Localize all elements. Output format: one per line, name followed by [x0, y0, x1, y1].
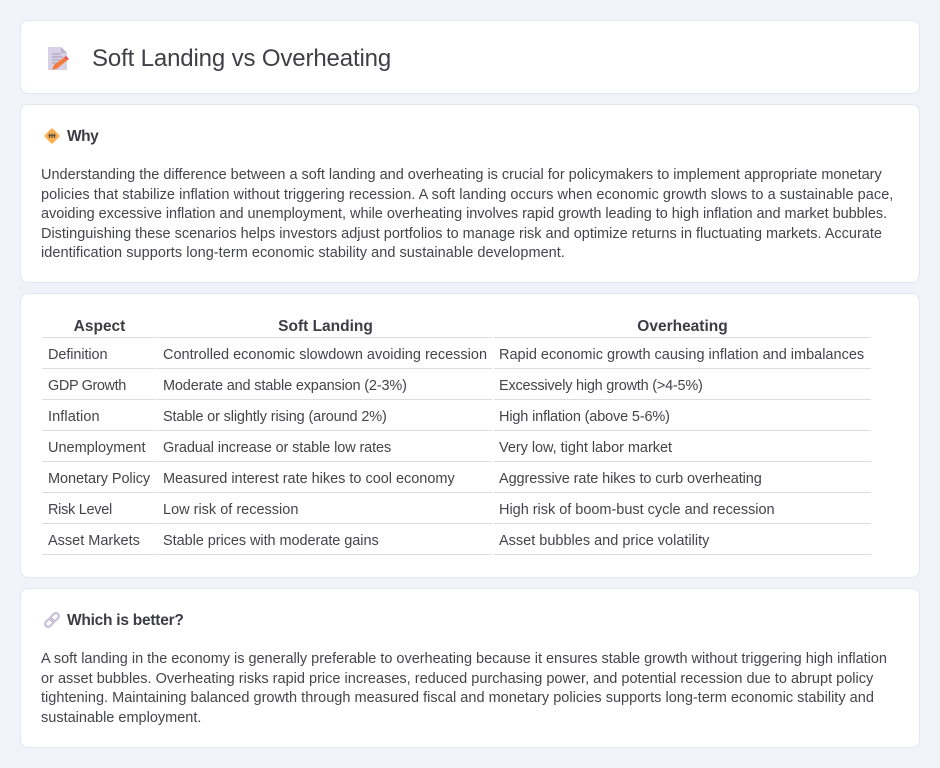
- row: risk level: Risk Level: [48, 502, 112, 518]
- row: asset markets: Asset Markets: [48, 533, 140, 549]
- text block: verdict: [41, 651, 887, 726]
- row: risk level: High risk of boom-bust cycle and recession: [499, 502, 775, 518]
- text block: why explanation: Understanding the difference between a soft landing and overheating is crucial for policymakers to implement appropriate monetary: [41, 167, 882, 183]
- heading: why: Why: [67, 128, 98, 145]
- icon: warning diamond: [44, 128, 60, 144]
- row: definition: Definition: [48, 347, 107, 363]
- text block: verdict: A soft landing in the economy is generally preferable to overheating because it ensures stable growth without triggering high inflation: [41, 651, 887, 667]
- text block: why explanation: [41, 167, 893, 261]
- panel: why: [20, 104, 920, 283]
- heading: which is better: Which is better?: [67, 612, 184, 629]
- icon: document with pencil: [48, 47, 69, 70]
- table header: Soft Landing: [278, 318, 373, 335]
- row: monetary policy: Aggressive rate hikes to curb overheating: [499, 471, 762, 487]
- row: definition: Rapid economic growth causing inflation and imbalances: [499, 347, 864, 363]
- panel: title header: [20, 20, 920, 94]
- text block: why explanation: identification supports long-term economic stability and sustainable development.: [41, 245, 565, 261]
- table header: [74, 318, 728, 335]
- icon: chain link: [44, 612, 60, 628]
- row: definition: Controlled economic slowdown avoiding recession: [163, 347, 487, 363]
- text block: verdict: tightening. Maintaining balanced growth through measured fiscal and monetary policies supports long-term economic stability and: [41, 690, 874, 706]
- row: inflation: Inflation: [48, 409, 100, 425]
- text block: why explanation: policies that stabilize inflation without triggering recession. A soft landing occurs when economic growth slows to a sustainable pace,: [41, 186, 893, 202]
- title: Soft Landing vs Overheating: [92, 45, 391, 72]
- row: gdp growth: GDP Growth: [48, 378, 126, 394]
- row: definition: [48, 347, 864, 363]
- text block: why explanation: avoiding excessive inflation and unemployment, while overheating involves rapid growth leading to high inflation and market bubbles.: [41, 206, 887, 222]
- row: gdp growth: [48, 378, 703, 394]
- text block: verdict: or asset bubbles. Overheating risks rapid price increases, reduced purchasing power, and potential recession due to abrupt policy: [41, 670, 873, 686]
- panel: which is better: [20, 588, 920, 748]
- row: inflation: [48, 409, 670, 425]
- table header: Aspect: [74, 318, 125, 335]
- row: monetary policy: Monetary Policy: [48, 471, 150, 487]
- row: gdp growth: Excessively high growth (>4-5%): [499, 378, 703, 394]
- text block: why explanation: Distinguishing these scenarios helps investors adjust portfolios to manage risk and optimize returns in fluctuating markets. Accurate: [41, 226, 882, 242]
- panel: comparison table: [20, 293, 920, 578]
- row: inflation: High inflation (above 5-6%): [499, 409, 670, 425]
- row: risk level: Low risk of recession: [163, 502, 298, 518]
- row: monetary policy: Measured interest rate hikes to cool economy: [163, 471, 455, 487]
- row: inflation: Stable or slightly rising (around 2%): [163, 409, 387, 425]
- row: unemployment: Unemployment: [48, 440, 146, 456]
- row: asset markets: Stable prices with moderate gains: [163, 533, 379, 549]
- row: unemployment: [48, 440, 672, 456]
- row: unemployment: Gradual increase or stable low rates: [163, 440, 391, 456]
- row: risk level: [48, 502, 775, 518]
- row: monetary policy: [48, 471, 762, 487]
- row: unemployment: Very low, tight labor market: [499, 440, 672, 456]
- table header: Overheating: [637, 318, 728, 335]
- row: asset markets: [48, 533, 710, 549]
- row: gdp growth: Moderate and stable expansion (2-3%): [163, 378, 407, 394]
- row: asset markets: Asset bubbles and price volatility: [499, 533, 709, 549]
- text block: verdict: sustainable employment.: [41, 710, 201, 726]
